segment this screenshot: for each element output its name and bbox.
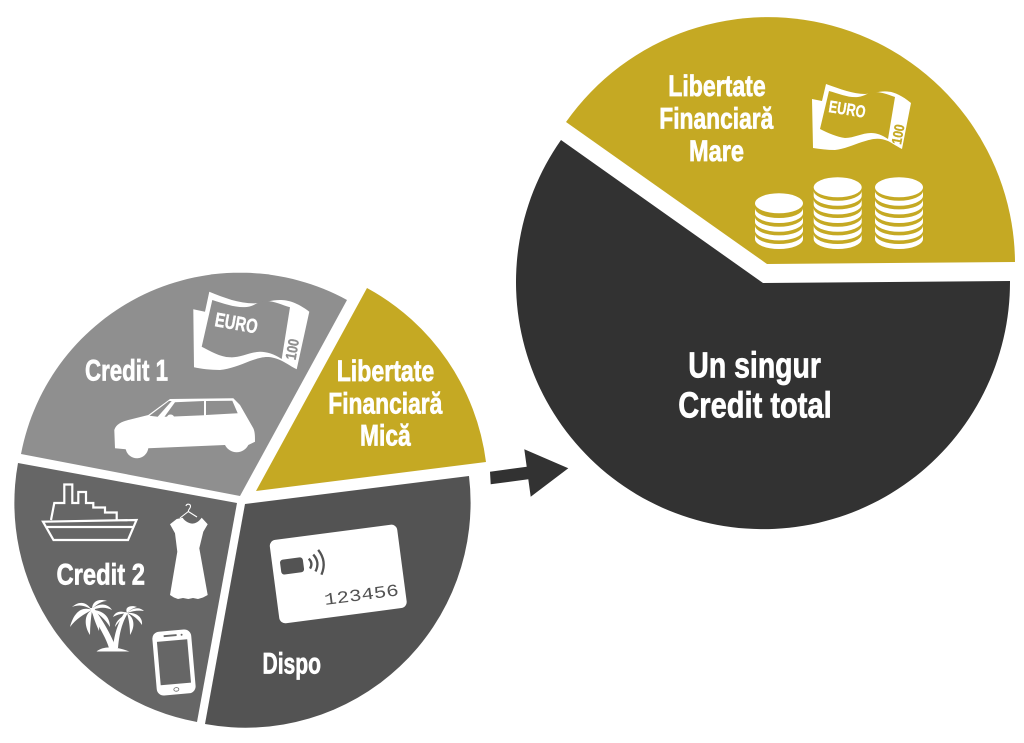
label: Credit 1: Credit 1: [85, 354, 168, 388]
arrow: from left pie to right pie: [490, 449, 568, 497]
slice: Un singur Credit total: [516, 140, 1010, 529]
panel: Credit 2 slice: [14, 463, 237, 722]
panel: Credit 1 slice: [21, 273, 347, 496]
label: Libertate Financiară Mică: Mică: [360, 420, 411, 453]
label: Un singur Credit total: Credit total: [678, 385, 832, 426]
icon: ship: [43, 484, 136, 540]
icon: palm trees: [70, 600, 144, 652]
icon: euro banknote: EURO: [213, 309, 259, 338]
panel: right pie chart: [516, 17, 1015, 529]
icon: contactless bank card: 123456: [323, 582, 400, 611]
label: Libertate Financiară Mare: [659, 70, 774, 168]
label: Libertate Financiară Mică: Financiară: [328, 387, 443, 420]
label: Libertate Financiară Mare: Libertate: [668, 70, 766, 103]
coin stack: left: [755, 193, 803, 249]
icon: euro banknote: 100: [888, 123, 907, 146]
panel: Dispo slice: [205, 476, 471, 728]
panel: small financial freedom slice: [256, 288, 486, 491]
panel: single total credit slice: [516, 140, 1010, 529]
icon: car: [114, 398, 255, 458]
icon: euro banknote: [812, 84, 911, 150]
label: Libertate Financiară Mică: [328, 355, 443, 453]
label: Un singur Credit total: [678, 345, 832, 426]
label: Credit 2: Credit 2: [56, 558, 145, 591]
slice: Libertate Financiară Mare: [566, 17, 1015, 264]
slice: Credit 1: [21, 273, 347, 496]
panel: large financial freedom slice: [566, 17, 1015, 264]
icon: euro banknote: [193, 292, 309, 370]
coin stack: right: [875, 177, 923, 249]
icon: euro banknote: EURO: [827, 97, 867, 122]
icon: coin stacks: [755, 177, 923, 249]
label: Libertate Financiară Mică: Libertate: [337, 355, 434, 388]
icon: contactless bank card: [269, 524, 407, 624]
slice: Dispo: [205, 476, 471, 728]
icon: euro banknote: 100: [283, 338, 303, 361]
label: Dispo: Dispo: [262, 647, 321, 680]
slice: Libertate Financiară Mică: [256, 288, 486, 491]
label: Un singur Credit total: Un singur: [688, 345, 821, 386]
slice: Credit 2: [14, 463, 237, 722]
icon: smartphone: [152, 629, 196, 696]
label: Libertate Financiară Mare: Financiară: [659, 102, 774, 135]
label: Libertate Financiară Mare: Mare: [689, 135, 744, 168]
icon: dress on hanger: [170, 504, 208, 599]
panel: left pie chart: [14, 273, 486, 728]
coin stack: middle: [814, 177, 862, 249]
